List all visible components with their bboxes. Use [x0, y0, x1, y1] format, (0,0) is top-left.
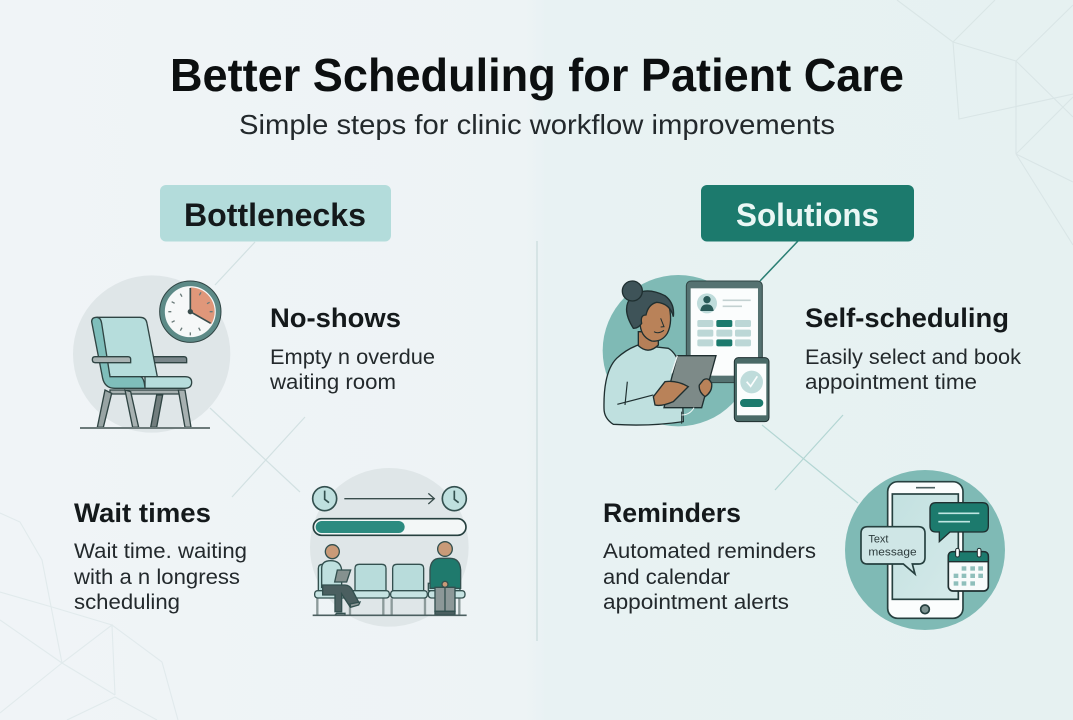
text: wait times: [73, 498, 247, 614]
icon: waiting room with progress bar: [310, 468, 469, 627]
subtitle: Simple steps for clinic workflow improvements: [239, 109, 835, 140]
text: reminders: Reminders: [603, 498, 741, 528]
heading: Solutions: [701, 185, 914, 242]
heading: Solutions: Solutions: [736, 197, 879, 233]
text: no-shows: waiting room: [269, 371, 396, 394]
panel: bottlenecks: [73, 185, 469, 627]
text: reminders: appointment alerts: [603, 591, 789, 614]
text: reminders: Automated reminders: [603, 540, 816, 563]
callout text: Text message: Text: [868, 534, 888, 546]
callout text: Text message: message: [868, 547, 917, 559]
text: wait times: with a n longress: [73, 566, 240, 589]
text: self-scheduling: Easily select and book: [805, 346, 1022, 369]
icon: woman booking on tablet and phone: [603, 275, 769, 426]
text: reminders: [603, 498, 816, 614]
text: self-scheduling: [805, 303, 1022, 394]
icon: empty chair and clock: [73, 275, 230, 433]
title: Better Scheduling for Patient Care: [170, 49, 904, 101]
text: wait times: scheduling: [74, 591, 180, 614]
icon: phone with messages and calendar: [845, 470, 1005, 630]
text: no-shows: Empty n overdue: [270, 346, 435, 369]
text: wait times: Wait time. waiting: [74, 540, 247, 563]
text: no-shows: No-shows: [270, 303, 401, 333]
text: wait times: Wait times: [74, 498, 211, 528]
text: self-scheduling: appointment time: [805, 371, 977, 394]
heading: Bottlenecks: [160, 185, 391, 242]
text: reminders: and calendar: [603, 566, 730, 589]
callout text: Text message: [868, 534, 917, 559]
heading: Bottlenecks: Bottlenecks: [184, 197, 366, 233]
text: self-scheduling: Self-scheduling: [805, 303, 1009, 333]
panel: solutions: [603, 185, 1022, 630]
text: no-shows: [269, 303, 435, 394]
